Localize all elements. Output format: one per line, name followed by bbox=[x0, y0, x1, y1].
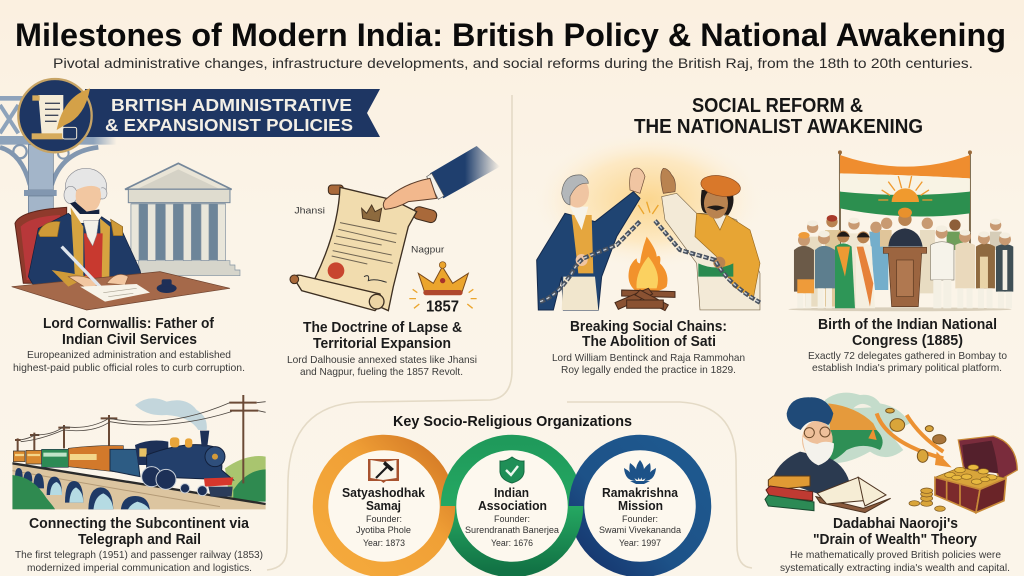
banner: section heading bbox=[85, 89, 380, 137]
text: Drain of Wealth: "Drain of Wealth" Theory bbox=[813, 532, 977, 548]
panel dividers bbox=[267, 95, 752, 570]
text: Drain of Wealth: systematically extracting india's wealth and capital. bbox=[780, 562, 1010, 574]
text: Indian Association: Indian bbox=[494, 486, 529, 500]
front row bbox=[794, 225, 1013, 308]
text: Lord Cornwallis: highest-paid public official roles to curb corruption. bbox=[13, 362, 245, 374]
back row bbox=[805, 215, 1002, 307]
panel: key socio-religious organizations bbox=[318, 413, 706, 572]
text: Ramakrishna Mission: Ramakrishna bbox=[602, 486, 679, 500]
text: Indian National Congress: Birth of the Indian National bbox=[818, 317, 997, 333]
heading: social reform: SOCIAL REFORM & bbox=[692, 95, 863, 117]
text: Indian National Congress: Exactly 72 delegates gathered in Bombay to bbox=[808, 350, 1007, 362]
text: Satyashodhak Samaj: Year: 1873 bbox=[363, 538, 405, 548]
illustration: breaking chains of sati bbox=[532, 130, 765, 311]
subtitle: Pivotal administrative changes, infrastructure developments, and social reforms during the British Raj, from the 18th to 20th centuries. bbox=[53, 55, 973, 71]
text: Telegraph and Rail: Telegraph and Rail bbox=[78, 532, 201, 548]
text: Ramakrishna Mission bbox=[599, 486, 681, 548]
text: Abolition of Sati bbox=[552, 319, 745, 376]
text: Indian Association bbox=[465, 486, 559, 548]
text: Lord Cornwallis bbox=[13, 316, 245, 374]
title: Milestones of Modern India: British Policy & National Awakening bbox=[15, 17, 1006, 53]
illustration: doctrine scroll, hand and crown: Nagpur bbox=[411, 245, 444, 255]
text: Indian Association: Founder: bbox=[494, 514, 530, 524]
text: Doctrine of Lapse: The Doctrine of Lapse & bbox=[303, 320, 462, 336]
illustration: iron bridge truss bbox=[0, 96, 117, 219]
heading: organizations: Key Socio-Religious Organizations bbox=[393, 413, 632, 430]
illustration: doctrine scroll, hand and crown: Jhansi bbox=[294, 205, 325, 215]
text: Indian National Congress bbox=[808, 317, 1007, 374]
text: Drain of Wealth bbox=[780, 516, 1010, 574]
banner: section heading: & EXPANSIONIST POLICIES bbox=[105, 115, 353, 135]
text: Satyashodhak Samaj: Satyashodhak bbox=[342, 486, 425, 500]
text: Abolition of Sati: Lord William Bentinck and Raja Rammohan bbox=[552, 352, 745, 364]
illustration: doctrine scroll, hand and crown: 1857 bbox=[426, 299, 459, 316]
text: Telegraph and Rail bbox=[15, 516, 263, 574]
text: Indian Association: Year: 1676 bbox=[491, 538, 533, 548]
illustration: government building bbox=[125, 163, 240, 276]
text: Doctrine of Lapse bbox=[287, 320, 477, 378]
text: Indian National Congress: establish India's primary political platform. bbox=[812, 362, 1002, 374]
heading: social reform: THE NATIONALIST AWAKENING bbox=[634, 116, 923, 138]
text: Abolition of Sati: Roy legally ended the practice in 1829. bbox=[561, 364, 736, 376]
illustration: drain of wealth bbox=[765, 393, 1017, 513]
panel: social reform and nationalist awakening bbox=[532, 95, 1017, 574]
text: Ramakrishna Mission: Founder: bbox=[622, 514, 658, 524]
text: Abolition of Sati: Breaking Social Chains: bbox=[570, 319, 727, 335]
text: Satyashodhak Samaj: Founder: bbox=[366, 514, 402, 524]
text: Satyashodhak Samaj: Samaj bbox=[366, 499, 401, 513]
chart: interlocking rings bbox=[318, 440, 706, 572]
illustration: doctrine scroll, hand and crown bbox=[290, 146, 500, 316]
text: Doctrine of Lapse: Lord Dalhousie annexed states like Jhansi bbox=[287, 354, 477, 366]
text: Doctrine of Lapse: and Nagpur, fueling the 1857 Revolt. bbox=[300, 366, 463, 378]
text: Satyashodhak Samaj: Jyotiba Phole bbox=[356, 525, 411, 535]
illustration: Indian National Congress gathering bbox=[788, 150, 1013, 311]
icon: lotus bbox=[624, 460, 656, 484]
panel: British administrative policies bbox=[0, 79, 500, 574]
text: Telegraph and Rail: Connecting the Subcontinent via bbox=[29, 516, 250, 532]
text: Drain of Wealth: Dadabhai Naoroji's bbox=[833, 516, 958, 532]
text: Ramakrishna Mission: Swami Vivekananda bbox=[599, 525, 681, 535]
text: Indian National Congress: Congress (1885) bbox=[852, 333, 963, 349]
text: Lord Cornwallis: Lord Cornwallis: Father of bbox=[43, 316, 214, 332]
text: Indian Association: Surendranath Banerjea bbox=[465, 525, 559, 535]
heading: social reform bbox=[634, 95, 923, 138]
illustration: train and telegraph bbox=[12, 395, 266, 513]
text: Doctrine of Lapse: Territorial Expansion bbox=[313, 336, 451, 352]
illustration: Lord Cornwallis at desk bbox=[12, 168, 230, 310]
text: Ramakrishna Mission: Mission bbox=[618, 499, 663, 513]
text: Telegraph and Rail: modernized imperial communication and logistics. bbox=[27, 562, 252, 574]
text: Telegraph and Rail: The first telegraph (1951) and passenger railway (1853) bbox=[15, 549, 263, 561]
text: Satyashodhak Samaj bbox=[342, 486, 425, 548]
icon: shield bbox=[500, 457, 524, 483]
text: Lord Cornwallis: Europeanized administration and established bbox=[27, 349, 231, 361]
text: Indian Association: Association bbox=[478, 499, 547, 513]
speaker and podium bbox=[883, 208, 927, 307]
text: Ramakrishna Mission: Year: 1997 bbox=[619, 538, 661, 548]
banner: section heading: BRITISH ADMINISTRATIVE bbox=[111, 95, 352, 115]
text: Lord Cornwallis: Indian Civil Services bbox=[62, 332, 197, 348]
text: Abolition of Sati: The Abolition of Sati bbox=[582, 334, 716, 350]
icon: scroll and quill badge bbox=[18, 79, 92, 152]
text: Drain of Wealth: He mathematically proved British policies were bbox=[790, 549, 1001, 561]
icon: book and hammer bbox=[368, 459, 399, 483]
